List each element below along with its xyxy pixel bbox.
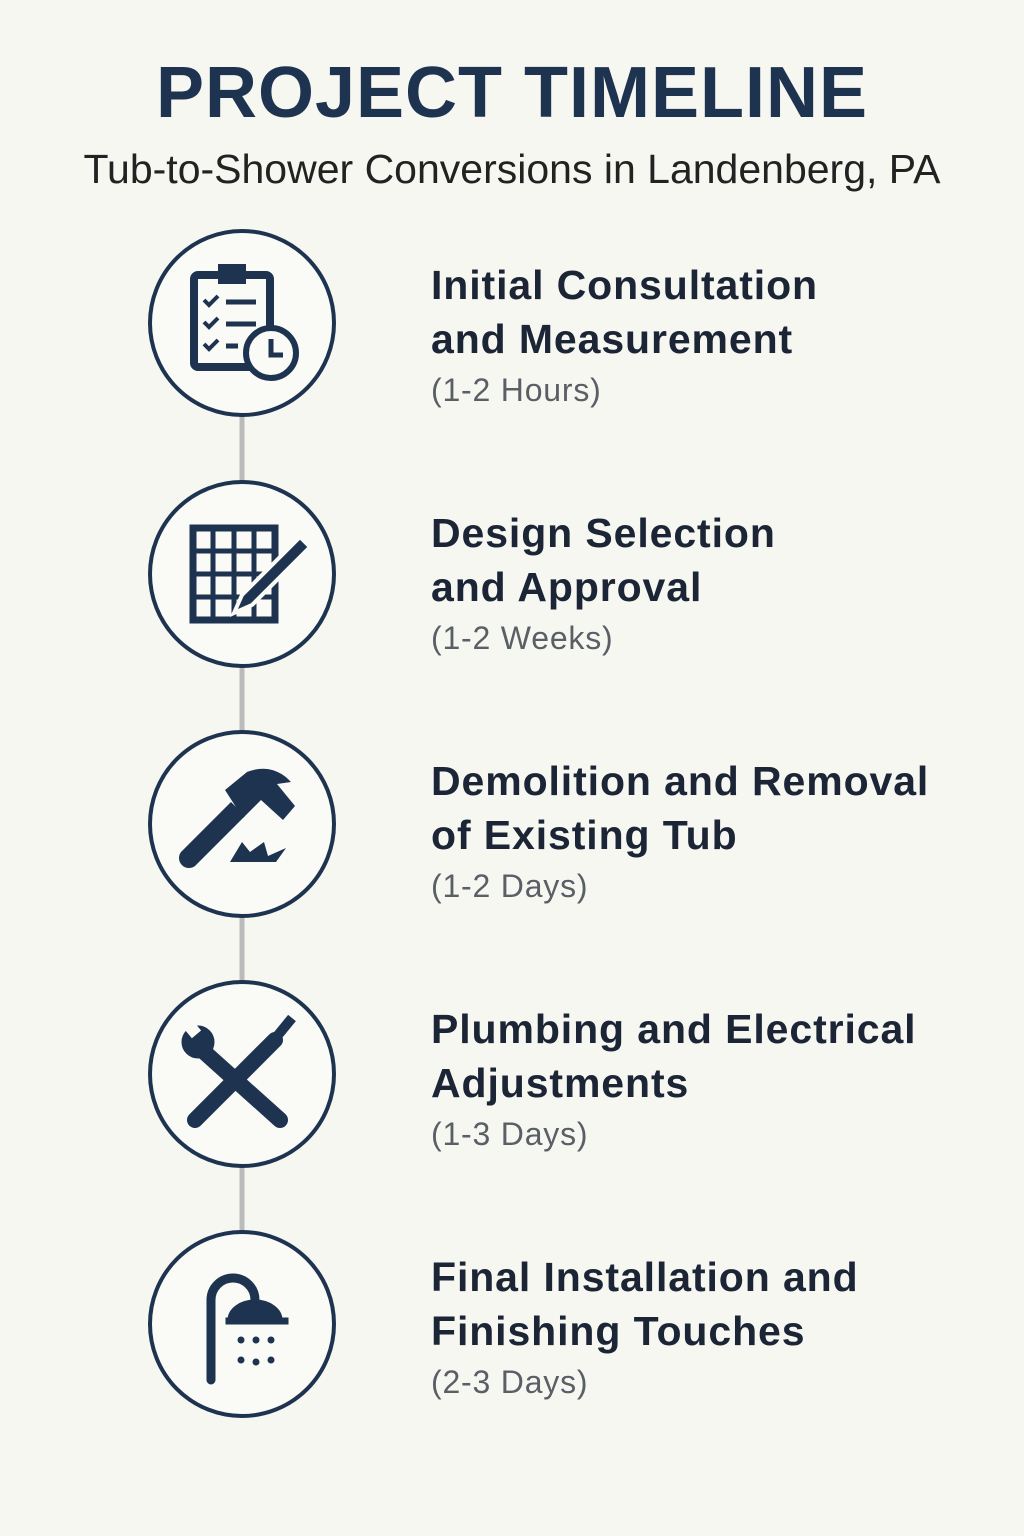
step 4 [431,1006,916,1152]
title: PROJECT TIMELINE [156,53,868,133]
icon: hammer [150,732,334,916]
subtitle: Tub-to-Shower Conversions in Landenberg, PA [84,146,940,192]
step 3: of Existing Tub [431,812,738,858]
step 5: (2-3 Days) [431,1364,588,1400]
step 4: (1-3 Days) [431,1116,588,1152]
step 1 [431,262,818,408]
icon: clipboard [150,231,334,415]
step 2: and Approval [431,564,702,610]
step 2 [431,510,776,656]
step 5: Finishing Touches [431,1308,805,1354]
icon: shower [150,1232,334,1416]
step 4: Adjustments [431,1060,689,1106]
icon: grid and pencil [150,482,334,666]
step 4: Plumbing and Electrical [431,1006,916,1052]
icon: wrench and screwdriver [150,982,334,1166]
step 1: (1-2 Hours) [431,372,602,408]
step 2: Design Selection [431,510,776,556]
step 3: (1-2 Days) [431,868,588,904]
step 5: Final Installation and [431,1254,859,1300]
step 3 [431,758,929,904]
step 3: Demolition and Removal [431,758,929,804]
step 5 [431,1254,859,1400]
step 1: and Measurement [431,316,793,362]
step 2: (1-2 Weeks) [431,620,613,656]
step 1: Initial Consultation [431,262,818,308]
